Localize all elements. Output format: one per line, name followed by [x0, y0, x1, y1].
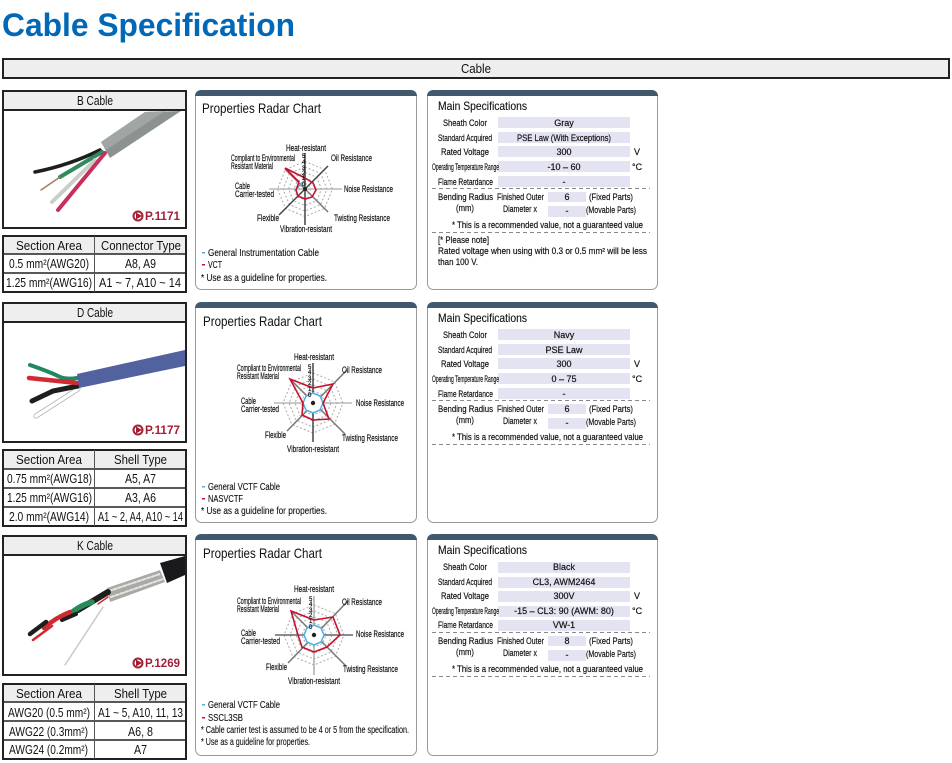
panel: B main specifications: [* Please note]	[438, 235, 489, 245]
table: K Cable section area: AWG22 (0.3mm²)	[9, 724, 88, 739]
panel: B main specifications: (Fixed Parts)	[589, 192, 633, 202]
radar chart: Vibration-resistant	[280, 224, 332, 234]
radar chart: 1	[308, 387, 312, 393]
table: B Cable section area: Section Area	[16, 238, 83, 253]
panel: B main specifications: Finished Outer	[497, 192, 544, 202]
panel: D main specifications: -	[566, 418, 568, 428]
legend: NASVCTF	[208, 494, 243, 505]
radar chart: Carrier-tested	[235, 189, 274, 199]
panel: K main specifications: VW-1	[553, 620, 575, 630]
radar chart: 1	[302, 176, 306, 182]
radar chart: 5	[302, 154, 306, 160]
table: D Cable section area: A3, A6	[125, 490, 156, 505]
panel: B main specifications	[427, 90, 658, 290]
radar chart	[237, 584, 404, 686]
radar chart: Noise Resistance	[356, 398, 404, 408]
legend	[201, 248, 327, 284]
radar chart: 0	[309, 625, 313, 631]
table: K Cable section area: Shell Type	[114, 686, 167, 701]
panel: K main specifications: Finished Outer	[497, 636, 544, 646]
panel: D main specifications: Navy	[554, 330, 575, 340]
radar chart: Compliant to Environmental	[231, 153, 295, 163]
page reference P.1171: P.1171	[145, 209, 180, 223]
panel: K main specifications: (Fixed Parts)	[589, 636, 633, 646]
panel: D Cable	[3, 303, 186, 442]
table: K Cable section area: A7	[134, 742, 147, 757]
radar chart: Compliant to Environmental	[237, 363, 301, 373]
radar chart: Heat-resistant	[294, 352, 334, 362]
radar chart: Heat-resistant	[286, 143, 326, 153]
image: B cable photo	[35, 111, 181, 210]
radar chart: 2	[302, 171, 306, 177]
panel: B radar chart	[195, 90, 417, 290]
radar chart: Vibration-resistant	[287, 444, 339, 454]
panel: B radar chart: Properties Radar Chart	[202, 100, 321, 116]
panel: D main specifications: 0 – 75	[551, 374, 577, 384]
legend: * Cable carrier test is assumed to be 4 or 5 from the specification.	[201, 725, 409, 736]
table: D Cable section area: 1.25 mm²(AWG16)	[7, 490, 92, 505]
panel: K main specifications: V	[634, 591, 640, 601]
panel: B main specifications: * This is a recommended value, not a guaranteed value	[452, 220, 643, 230]
image: K cable photo	[30, 556, 185, 665]
radar chart: 3	[302, 166, 306, 172]
table: D Cable section area: A5, A7	[125, 471, 156, 486]
panel: B main specifications: Operating Temperature Range	[432, 162, 499, 172]
table: K Cable section area	[3, 684, 186, 759]
panel: K main specifications	[427, 534, 658, 756]
panel: B main specifications: -	[562, 177, 566, 187]
radar chart: 0	[302, 182, 306, 188]
panel: B main specifications: -10 – 60	[547, 162, 581, 172]
panel: K main specifications: Main Specifications	[438, 543, 527, 557]
radar chart: Compliant to Environmental	[237, 596, 301, 606]
radar chart: 4	[309, 602, 313, 608]
panel: D main specifications: Diameter x	[503, 416, 537, 426]
panel: K main specifications: * This is a recommended value, not a guaranteed value	[452, 664, 643, 674]
table: K Cable section area: Section Area	[16, 686, 83, 701]
panel: B main specifications: (Movable Parts)	[586, 205, 636, 215]
table: K Cable section area: AWG24 (0.2mm²)	[9, 742, 88, 757]
radar chart: 0	[308, 393, 312, 399]
legend: SSCL3SB	[208, 713, 243, 724]
radar chart: 2	[309, 613, 313, 619]
panel: K main specifications: Diameter x	[503, 648, 537, 658]
radar chart: Oil Resistance	[331, 153, 372, 163]
panel: D main specifications: Operating Temperature Range	[432, 374, 499, 384]
title: Cable Specification	[2, 7, 295, 43]
radar chart: Resistant Material	[231, 161, 273, 171]
panel: D main specifications: Main Specifications	[438, 311, 527, 325]
panel: D main specifications: 300	[556, 359, 572, 369]
radar chart: 5	[308, 365, 312, 371]
panel: B main specifications: PSE Law (With Exceptions)	[517, 133, 611, 143]
radar chart: Noise Resistance	[344, 184, 393, 194]
panel: K Cable	[3, 536, 186, 675]
panel: K main specifications: (Movable Parts)	[586, 649, 636, 659]
panel: D main specifications: (Fixed Parts)	[589, 404, 633, 414]
panel: D radar chart	[195, 302, 417, 522]
table: K Cable section area: A6, 8	[128, 724, 153, 739]
panel: B main specifications: Bending Radius	[438, 192, 493, 202]
radar chart: Flexible	[266, 662, 287, 672]
panel: K radar chart: Properties Radar Chart	[203, 545, 322, 561]
legend: General VCTF Cable	[208, 482, 280, 493]
panel: K main specifications: Flame Retardance	[438, 620, 493, 630]
panel: K main specifications: CL3, AWM2464	[533, 577, 595, 587]
table: D Cable section area: Shell Type	[114, 452, 167, 467]
legend: * Use as a guideline for properties.	[201, 506, 327, 517]
radar chart: Twisting Resistance	[342, 433, 398, 443]
panel: D main specifications: °C	[632, 374, 643, 384]
radar chart: Twisting Resistance	[343, 664, 398, 674]
panel: K Cable: K Cable	[77, 538, 113, 553]
table: D Cable section area	[3, 450, 186, 526]
radar chart: Cable	[241, 396, 256, 406]
legend	[201, 482, 327, 517]
panel: B main specifications: Gray	[554, 118, 574, 128]
panel: D main specifications: 6	[564, 404, 570, 414]
panel: B main specifications: -	[566, 206, 568, 216]
panel: D main specifications: Rated Voltage	[441, 359, 489, 369]
panel: D main specifications: Standard Acquired	[438, 345, 492, 355]
legend: General Instrumentation Cable	[208, 248, 319, 259]
radar chart: 5	[309, 597, 313, 603]
radar chart: Noise Resistance	[356, 629, 404, 639]
panel: B main specifications: °C	[632, 162, 643, 172]
page reference P.1177: P.1177	[145, 423, 180, 437]
panel: D main specifications: Bending Radius	[438, 404, 493, 414]
radar chart: Heat-resistant	[294, 584, 334, 594]
radar chart: 4	[308, 370, 312, 376]
panel: K main specifications: Bending Radius	[438, 636, 493, 646]
panel: D main specifications: Flame Retardance	[438, 389, 493, 399]
radar chart	[231, 143, 393, 234]
panel: B Cable: B Cable	[77, 93, 113, 108]
panel: K main specifications: -15 – CL3: 90 (AWM: 80)	[514, 606, 614, 616]
page reference P.1269: P.1269	[145, 656, 180, 670]
radar chart: Resistant Material	[237, 604, 279, 614]
panel: D main specifications: Sheath Color	[443, 330, 487, 340]
panel: D radar chart: Properties Radar Chart	[203, 313, 322, 329]
panel: K main specifications: (mm)	[456, 647, 474, 657]
panel: D main specifications: * This is a recommended value, not a guaranteed value	[452, 432, 643, 442]
panel: B main specifications: than 100 V.	[438, 257, 478, 267]
legend	[201, 700, 409, 748]
radar chart: Vibration-resistant	[288, 676, 340, 686]
panel: K main specifications: -	[566, 650, 568, 660]
radar chart: Oil Resistance	[342, 597, 382, 607]
panel: B main specifications: (mm)	[456, 203, 474, 213]
radar chart	[237, 352, 404, 454]
panel: K main specifications: Rated Voltage	[441, 591, 489, 601]
table: K Cable section area: A1 ~ 5, A10, 11, 13	[98, 705, 183, 720]
table: B Cable section area: Connector Type	[101, 238, 181, 253]
radar chart: 4	[302, 160, 306, 166]
panel: K main specifications: °C	[632, 606, 643, 616]
panel: K main specifications: Standard Acquired	[438, 577, 492, 587]
section bar: Cable	[3, 59, 949, 78]
table: B Cable section area: A1 ~ 7, A10 ~ 14	[99, 275, 181, 290]
panel: K main specifications: Sheath Color	[443, 562, 487, 572]
image: D cable photo	[29, 350, 185, 416]
radar chart: Carrier-tested	[241, 404, 279, 414]
radar chart: Cable	[235, 181, 250, 191]
panel: K radar chart	[195, 534, 417, 756]
table: D Cable section area: 0.75 mm²(AWG18)	[7, 471, 92, 486]
legend: VCT	[208, 260, 222, 271]
radar chart: Twisting Resistance	[334, 213, 390, 223]
panel: K main specifications: 300V	[553, 591, 575, 601]
panel: D main specifications: PSE Law	[545, 345, 583, 355]
radar chart: Carrier-tested	[241, 636, 280, 646]
radar chart: Resistant Material	[237, 371, 279, 381]
table: D Cable section area: 2.0 mm²(AWG14)	[9, 509, 89, 524]
panel: B main specifications: Rated voltage when using with 0.3 or 0.5 mm² will be less	[438, 246, 647, 256]
panel: D main specifications	[427, 302, 658, 522]
panel: B main specifications: Standard Acquired	[438, 133, 492, 143]
table: B Cable section area	[3, 236, 186, 292]
panel: B main specifications: Rated Voltage	[441, 147, 489, 157]
panel: B main specifications: Flame Retardance	[438, 177, 493, 187]
panel: D main specifications: V	[634, 359, 640, 369]
panel: B main specifications: Sheath Color	[443, 118, 487, 128]
panel: B main specifications: Main Specifications	[438, 99, 527, 113]
panel: B main specifications: V	[634, 147, 640, 157]
panel: B main specifications: Diameter x	[503, 204, 537, 214]
panel: D Cable: D Cable	[77, 305, 113, 320]
radar chart: Flexible	[257, 213, 279, 223]
radar chart: 3	[308, 376, 312, 382]
radar chart: 3	[309, 608, 313, 614]
legend: * Use as a guideline for properties.	[201, 737, 310, 748]
panel: D main specifications: Finished Outer	[497, 404, 544, 414]
legend: General VCTF Cable	[208, 700, 280, 711]
radar chart: Flexible	[265, 430, 286, 440]
legend: * Use as a guideline for properties.	[201, 273, 327, 284]
table: B Cable section area: 0.5 mm²(AWG20)	[9, 256, 89, 271]
panel: K main specifications: Operating Temperature Range	[432, 606, 499, 616]
panel: B main specifications: 300	[556, 147, 572, 157]
radar chart: Oil Resistance	[342, 365, 382, 375]
panel: D main specifications: -	[562, 389, 566, 399]
panel: D main specifications: (Movable Parts)	[586, 417, 636, 427]
panel: B Cable	[3, 91, 186, 228]
table: D Cable section area: Section Area	[16, 452, 83, 467]
table: B Cable section area: 1.25 mm²(AWG16)	[6, 275, 92, 290]
radar chart: Cable	[241, 628, 256, 638]
radar chart: 2	[308, 381, 312, 387]
panel: K main specifications: Black	[553, 562, 576, 572]
table: K Cable section area: AWG20 (0.5 mm²)	[8, 705, 90, 720]
table: B Cable section area: A8, A9	[125, 256, 156, 271]
panel: B main specifications: 6	[564, 192, 570, 202]
section bar: Cable: Cable	[461, 61, 491, 76]
panel: K main specifications: 8	[564, 636, 570, 646]
panel: D main specifications: (mm)	[456, 415, 474, 425]
table: D Cable section area: A1 ~ 2, A4, A10 ~ 14	[98, 509, 183, 524]
radar chart: 1	[309, 619, 313, 625]
